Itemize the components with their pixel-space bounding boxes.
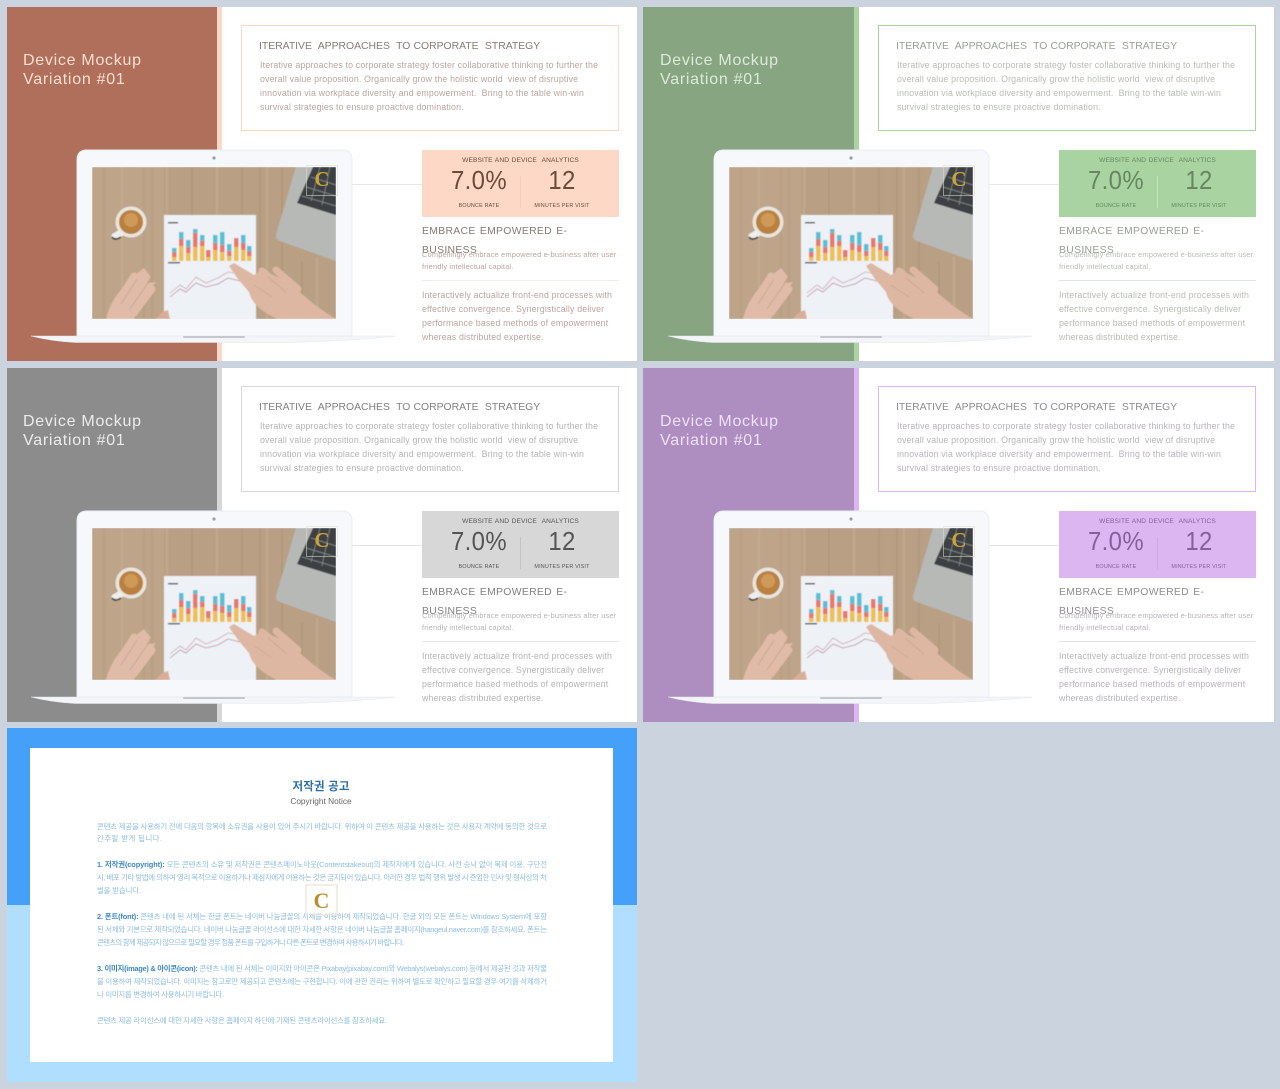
frame body text [897, 421, 1235, 473]
title [660, 52, 779, 88]
analytics heading: WEBSITE AND DEVICE ANALYTICS [1099, 157, 1216, 164]
long paragraph: whereas distributed expertise. [1059, 332, 1181, 342]
analytics box [1059, 511, 1256, 578]
brown sidebar [7, 7, 217, 361]
minutes value: 12 [1185, 526, 1213, 556]
logo watermark [943, 165, 975, 196]
panel: copyright notice [7, 728, 637, 1082]
frame body text [260, 60, 598, 112]
short paragraph [422, 611, 616, 632]
notice body text: 콘텐츠 제공을 사용하기 전에 다음의 항목에 소유권을 사용이 있어 주시기 바랍니다. 위하여 이 콘텐츠 제공을 사용하는 것은 사용자 계약에 동의한 것으로 [97, 822, 547, 831]
frame heading: ITERATIVE APPROACHES TO CORPORATE STRATEGY [896, 41, 1177, 52]
stat divider [1157, 176, 1158, 208]
accent strip [217, 7, 222, 361]
logo watermark: C [314, 888, 329, 913]
analytics heading: WEBSITE AND DEVICE ANALYTICS [462, 157, 579, 164]
laptop mockup [31, 150, 395, 343]
notice subtitle: Copyright Notice [290, 796, 352, 806]
title [660, 413, 779, 449]
notice body text: 간주될 받게 됩니다. [97, 834, 162, 843]
minutes label: MINUTES PER VISIT [1171, 564, 1227, 570]
frame body text: survival strategies to ensure proactive domination. [260, 102, 464, 112]
bounce rate value: 7.0% [1088, 526, 1144, 556]
frame body text: survival strategies to ensure proactive domination. [897, 463, 1101, 473]
frame body text [260, 421, 598, 473]
frame body text: overall value proposition. Organically grow the holistic world view of disruptive [260, 74, 578, 84]
long paragraph: effective convergence. Synergistically deliver [1059, 304, 1241, 314]
bounce rate label: BOUNCE RATE [1096, 564, 1136, 570]
analytics heading: WEBSITE AND DEVICE ANALYTICS [462, 518, 579, 525]
notice body text: 콘텐츠의 함께 제공되지 않으므로 필요할 경우 정품 폰트를 구입하거나 다른 폰트로 변경하여 사용하시기 바랍니다. [97, 938, 404, 947]
long paragraph: effective convergence. Synergistically deliver [1059, 665, 1241, 675]
notice body text: 3. 이미지(image) & 아이콘(icon): 콘텐츠 내에 된 서체는 이미지와 아이콘은 Pixabay(pixabay.com)와 Webalys(webalys.com) 등에서 제공된 것과 저작물 [97, 964, 547, 973]
notice body text: 된 서체와 기본으로 제작되었습니다. 네이버 나눔글꼴 라이선스에 대한 자세한 사항은 네이버 나눔글꼴 홈페이지(hangeul.naver.com)를 참조하세요. 폰트는 [97, 925, 547, 934]
frame heading: ITERATIVE APPROACHES TO CORPORATE STRATEGY [259, 402, 540, 413]
frame body text: overall value proposition. Organically grow the holistic world view of disruptive [260, 435, 578, 445]
title: Variation #01 [23, 71, 125, 88]
long paragraph: performance based methods of empowerment [1059, 679, 1245, 689]
title: Device Mockup [660, 52, 779, 69]
title: Device Mockup [660, 413, 779, 430]
long paragraph: whereas distributed expertise. [1059, 693, 1181, 703]
connector line [344, 184, 422, 185]
laptop mockup [31, 510, 395, 704]
frame heading: ITERATIVE APPROACHES TO CORPORATE STRATEGY [259, 41, 540, 52]
notice body text [97, 822, 547, 1025]
logo watermark: C [314, 528, 330, 552]
title: Device Mockup [23, 413, 142, 430]
long paragraph: Interactively actualize front-end processes with [1059, 651, 1249, 661]
subheading: EMBRACE EMPOWERED E-BUSINESS [1059, 587, 1204, 617]
analytics box [1059, 150, 1256, 217]
subheading: EMBRACE EMPOWERED E-BUSINESS [1059, 226, 1204, 256]
laptop mockup [668, 150, 1032, 343]
title: Variation #01 [23, 432, 125, 449]
frame body text: Iterative approaches to corporate strategy foster collaborative thinking to further the [260, 60, 598, 70]
short paragraph: Compellingly embrace empowered e-business after user [422, 250, 616, 259]
notice body text: 나 이미지를 변경하여 사용하시기 바랍니다. [97, 990, 224, 999]
bounce rate value: 7.0% [451, 165, 507, 195]
bounce rate value: 7.0% [1088, 165, 1144, 195]
short paragraph [1059, 611, 1254, 632]
minutes value: 12 [548, 526, 576, 556]
notice body text: 2. 폰트(font): 콘텐츠 내에 된 서체는 한글 폰트는 네이버 나눔글꼴의 서체를 이용하여 제작되었습니다. 한글 외의 모든 폰트는 Windows System에 포함 [97, 912, 547, 921]
analytics heading: WEBSITE AND DEVICE ANALYTICS [1099, 518, 1216, 525]
notice title: 저작권 공고 [292, 779, 350, 793]
bounce rate label: BOUNCE RATE [459, 203, 499, 209]
bounce rate label: BOUNCE RATE [1096, 203, 1136, 209]
frame body text: innovation via workplace diversity and empowerment. Bring to the table win-win [260, 449, 584, 459]
notice body text: 을 이용하여 제작되었습니다. 이미지는 참고로만 제공되고 콘텐츠에는 구현합니다. 이에 관한 권리는 위하여 별도로 확인하고 필요할 경우 여기를 삭제하거 [97, 977, 547, 986]
stat divider [520, 176, 521, 208]
frame body text: innovation via workplace diversity and empowerment. Bring to the table win-win [260, 88, 584, 98]
short paragraph: friendly intellectual capital. [1059, 623, 1150, 632]
long paragraph: whereas distributed expertise. [422, 332, 544, 342]
frame body text [897, 60, 1235, 112]
logo watermark [306, 885, 337, 915]
logo watermark: C [951, 167, 967, 191]
laptop mockup [668, 510, 1032, 704]
frame heading: ITERATIVE APPROACHES TO CORPORATE STRATEGY [896, 402, 1177, 413]
frame body text: survival strategies to ensure proactive domination. [897, 102, 1101, 112]
notice body text: 1. 저작권(copyright): 모든 콘텐츠의 소유 및 저작권은 콘텐츠메이노아웃(Contentstakeout)의 제작자에게 있습니다. 사전 승낙 없이 복제 이용, 구단전 [97, 860, 547, 869]
bounce rate value: 7.0% [451, 526, 507, 556]
panel: grey variation [7, 368, 637, 722]
logo watermark [306, 165, 338, 196]
logo watermark [306, 526, 338, 557]
short paragraph: Compellingly embrace empowered e-business after user [422, 611, 616, 620]
accent strip [854, 7, 859, 361]
title: Variation #01 [660, 71, 762, 88]
minutes label: MINUTES PER VISIT [1171, 203, 1227, 209]
frame body text: survival strategies to ensure proactive domination. [260, 463, 464, 473]
short paragraph: Compellingly embrace empowered e-business after user [1059, 611, 1253, 620]
long paragraph: effective convergence. Synergistically deliver [422, 665, 604, 675]
frame body text: overall value proposition. Organically grow the holistic world view of disruptive [897, 74, 1215, 84]
title: Variation #01 [660, 432, 762, 449]
accent strip [217, 368, 222, 722]
panel: green variation [644, 7, 1274, 361]
title [23, 52, 142, 88]
text frame [241, 386, 619, 492]
long paragraph [422, 651, 612, 703]
short paragraph [1059, 250, 1254, 271]
title [23, 413, 142, 449]
short paragraph: Compellingly embrace empowered e-business after user [1059, 250, 1253, 259]
analytics box [422, 150, 619, 217]
minutes value: 12 [1185, 165, 1213, 195]
title: Device Mockup [23, 52, 142, 69]
frame body text: innovation via workplace diversity and empowerment. Bring to the table win-win [897, 88, 1221, 98]
frame body text: innovation via workplace diversity and empowerment. Bring to the table win-win [897, 449, 1221, 459]
long paragraph: Interactively actualize front-end processes with [1059, 290, 1249, 300]
connector line [344, 545, 422, 546]
logo watermark: C [951, 528, 967, 552]
long paragraph: Interactively actualize front-end processes with [422, 651, 612, 661]
long paragraph: performance based methods of empowerment [1059, 318, 1245, 328]
long paragraph [422, 290, 612, 342]
long paragraph: performance based methods of empowerment [422, 318, 608, 328]
logo watermark [943, 526, 975, 557]
connector line [981, 545, 1059, 546]
text frame [878, 25, 1256, 131]
short paragraph: friendly intellectual capital. [422, 623, 513, 632]
subheading: EMBRACE EMPOWERED E-BUSINESS [422, 587, 567, 617]
long paragraph: performance based methods of empowerment [422, 679, 608, 689]
long paragraph [1059, 290, 1249, 342]
green sidebar [643, 7, 854, 361]
long paragraph: effective convergence. Synergistically deliver [422, 304, 604, 314]
text frame [878, 386, 1256, 492]
long paragraph: Interactively actualize front-end processes with [422, 290, 612, 300]
accent strip [854, 368, 859, 722]
analytics box [422, 511, 619, 578]
minutes label: MINUTES PER VISIT [534, 203, 590, 209]
text frame [241, 25, 619, 131]
purple sidebar [643, 368, 854, 722]
bounce rate label: BOUNCE RATE [459, 564, 499, 570]
stat divider [520, 537, 521, 569]
subheading: EMBRACE EMPOWERED E-BUSINESS [422, 226, 567, 256]
short paragraph: friendly intellectual capital. [422, 262, 513, 271]
notice body text: 콘텐츠 제공 라이선스에 대한 자세한 사항은 홈페이지 하단에 기재된 콘텐츠라이선스를 참조하세요. [97, 1016, 387, 1025]
notice body text: 시, 배포 기타 방법에 의하여 영리 목적으로 이용하거나 제삼자에게 이용하는 것은 금지되어 있습니다. 이러한 경우 법적 행위 발생 시 준엄한 민사 및 형사상의 처 [97, 873, 547, 882]
frame body text: Iterative approaches to corporate strategy foster collaborative thinking to further the [897, 421, 1235, 431]
stat divider [1157, 537, 1158, 569]
long paragraph: whereas distributed expertise. [422, 693, 544, 703]
logo watermark: C [314, 167, 330, 191]
frame body text: overall value proposition. Organically grow the holistic world view of disruptive [897, 435, 1215, 445]
notice body text: 벌을 받습니다. [97, 886, 141, 895]
connector line [981, 184, 1059, 185]
long paragraph [1059, 651, 1249, 703]
panel: brown variation [7, 7, 637, 361]
short paragraph: friendly intellectual capital. [1059, 262, 1150, 271]
frame body text: Iterative approaches to corporate strategy foster collaborative thinking to further the [260, 421, 598, 431]
panel: purple variation [644, 368, 1274, 722]
short paragraph [422, 250, 616, 271]
minutes value: 12 [548, 165, 576, 195]
grey sidebar [7, 368, 217, 722]
minutes label: MINUTES PER VISIT [534, 564, 590, 570]
frame body text: Iterative approaches to corporate strategy foster collaborative thinking to further the [897, 60, 1235, 70]
